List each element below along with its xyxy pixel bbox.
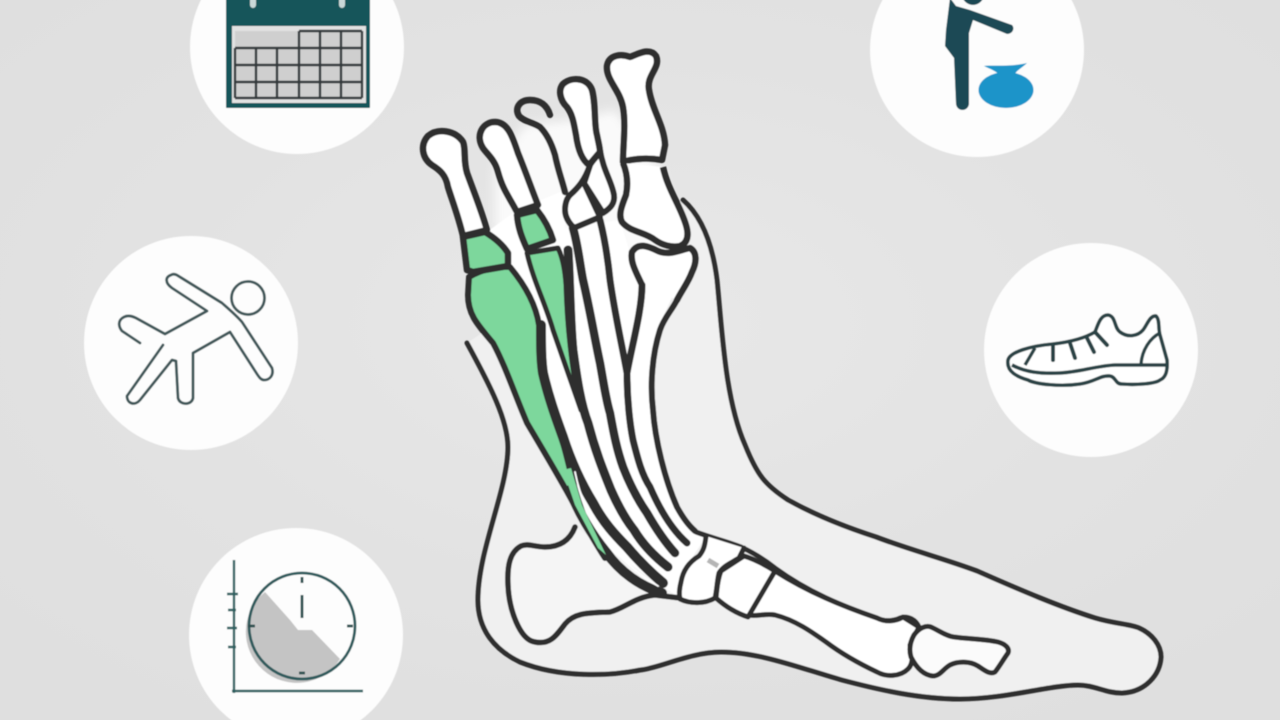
- white sliver: [575, 472, 658, 586]
- lower ankle tendon band: [570, 490, 662, 593]
- tarsal bone upper: [701, 538, 741, 578]
- green tendon tip: [563, 468, 606, 555]
- foot anatomy illustration: [423, 52, 1161, 699]
- first metatarsal outer line: [652, 300, 695, 531]
- green phalanx one: [463, 232, 508, 272]
- foot skin outline: [467, 200, 1161, 699]
- calendar sheet: [232, 26, 366, 103]
- clock shaded sector: [246, 592, 340, 683]
- figure stretching: [945, 0, 1013, 110]
- calendar grid: [235, 31, 362, 98]
- toe four middle bone: [584, 150, 614, 213]
- second metatarsal tendon: [573, 228, 675, 553]
- shoe toe and heel panels: [1025, 333, 1160, 365]
- white bone bundle: [487, 190, 705, 598]
- icon panel: falling person: [84, 236, 298, 450]
- icon panel: clock with chart axes: [189, 528, 403, 720]
- chart axes: [227, 560, 363, 693]
- icon panel: calendar: [190, 0, 404, 154]
- distal toe bone: [910, 626, 1008, 676]
- ice pack: [978, 63, 1034, 108]
- toe two: [480, 122, 538, 212]
- tarsal bone two: [716, 556, 775, 617]
- green phalanx two: [517, 210, 553, 249]
- clock face: [249, 573, 355, 679]
- top line of midfoot: [696, 532, 919, 627]
- soft highlight between toes: [495, 110, 680, 300]
- green metatarsal one: [468, 267, 605, 558]
- green metatarsal two: [527, 248, 581, 410]
- shoe laces: [1053, 332, 1107, 360]
- shoe outline: [1008, 315, 1167, 385]
- clock ticks and hand: [248, 577, 353, 673]
- calendar rings: [253, 0, 342, 5]
- person outline: [119, 274, 273, 404]
- toe three hook: [517, 100, 565, 192]
- icon panel: running shoe: [984, 243, 1198, 457]
- big toe distal phalanx: [607, 52, 665, 162]
- big toe proximal phalanx: [620, 163, 688, 247]
- calcaneus heel bone: [508, 527, 680, 643]
- grey marker on tarsal: [708, 560, 718, 566]
- toe four distal bone: [560, 79, 600, 165]
- icon panel: stretching and ice pack: [870, 0, 1084, 157]
- second ray tendon: [568, 250, 668, 567]
- toe one (leftmost): [423, 131, 487, 236]
- tarsal bone one: [679, 536, 744, 603]
- calendar body: [226, 0, 370, 108]
- third tendon pair: [600, 220, 687, 543]
- shoe midsole: [1012, 365, 1167, 373]
- first metatarsal head: [632, 246, 696, 300]
- thick inner tendon: [541, 325, 663, 583]
- person head: [232, 282, 264, 314]
- toe four small bones: [565, 165, 600, 228]
- second toe metatarsal: [748, 571, 919, 675]
